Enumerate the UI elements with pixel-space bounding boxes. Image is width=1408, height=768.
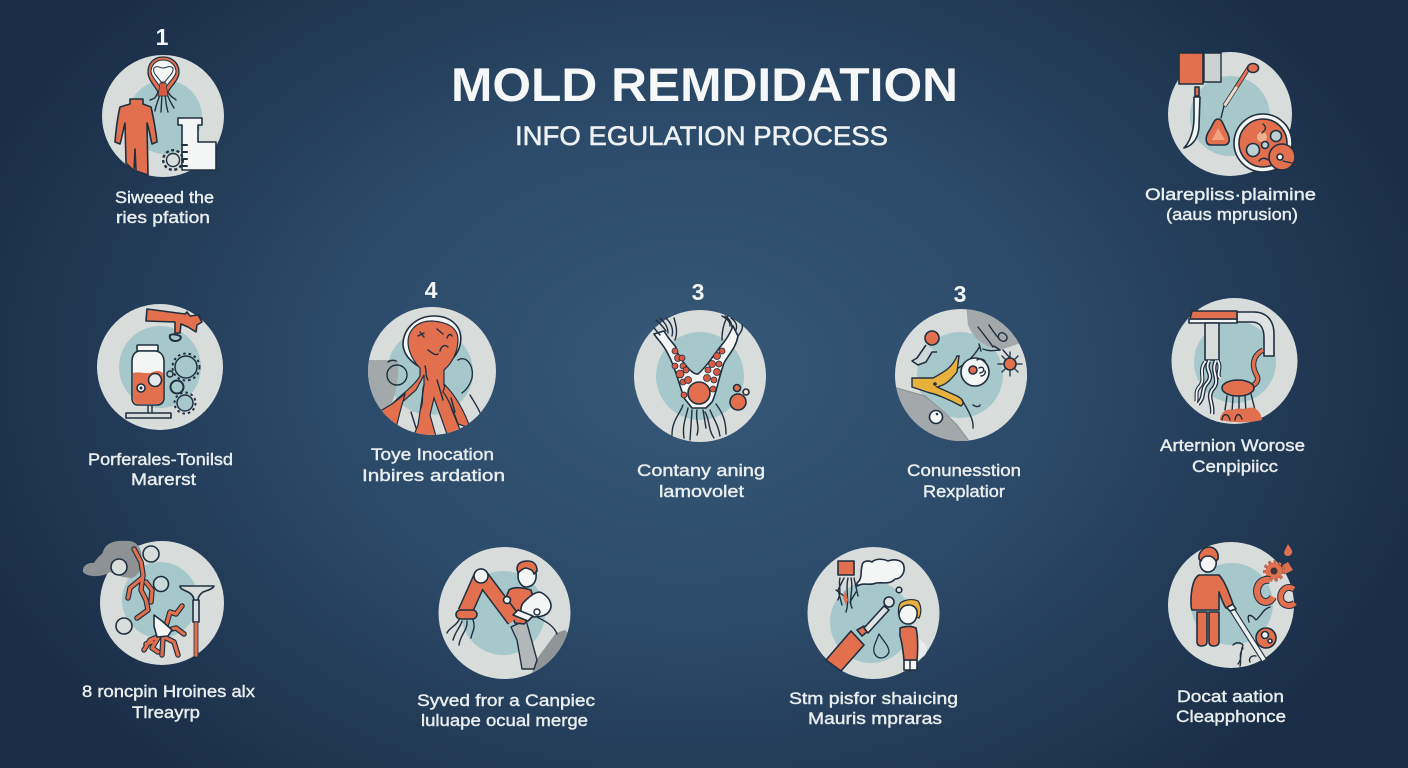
panel: top right step bbox=[1145, 52, 1316, 224]
label: Docat aation bbox=[1177, 687, 1284, 706]
step number 3: 3 bbox=[692, 279, 704, 305]
label: lamovolet bbox=[659, 482, 744, 501]
label: Toye Inocation bbox=[371, 445, 494, 464]
step number 4: 4 bbox=[425, 277, 438, 303]
label bbox=[789, 689, 958, 728]
label: Olarepliss·plaimine bbox=[1145, 185, 1316, 204]
step number 3: 3 bbox=[954, 281, 966, 307]
label: Arternion Worose bbox=[1160, 436, 1305, 455]
panel: step 3 right bbox=[895, 286, 1027, 501]
label: Porferales-Tonilsd bbox=[88, 450, 233, 469]
label bbox=[1145, 185, 1316, 224]
label: Cleapphonce bbox=[1176, 707, 1286, 726]
icon: mold growth bbox=[366, 307, 496, 440]
panel: step 1 bbox=[102, 24, 224, 227]
label: Tlreayrp bbox=[132, 703, 200, 722]
panel: bottom left step bbox=[82, 541, 256, 722]
panel: bottom centre-left step bbox=[417, 547, 596, 730]
label: Inbires ardation bbox=[362, 466, 505, 485]
label 1: ries pfation bbox=[116, 208, 210, 227]
label bbox=[362, 445, 505, 485]
label: (aaus mprusion) bbox=[1166, 205, 1298, 224]
icon: scraper, filter and petri dish bbox=[1168, 52, 1295, 176]
label bbox=[637, 461, 765, 501]
label: Conunesstion bbox=[907, 461, 1021, 480]
icon: worker cleaning with gears bbox=[1168, 542, 1295, 668]
label: Mauris mpraras bbox=[808, 709, 942, 728]
subtitle: INFO EGULATION PROCESS bbox=[515, 121, 888, 151]
label: 8 roncpin Hroines alx bbox=[82, 682, 256, 701]
label bbox=[1160, 436, 1305, 476]
label bbox=[82, 682, 256, 722]
panel: middle left step bbox=[88, 304, 233, 489]
label bbox=[1176, 687, 1286, 726]
panel: bottom centre-right step bbox=[789, 547, 958, 728]
label: Contany aning bbox=[637, 461, 765, 480]
label: Syved fror a Canpiec bbox=[417, 691, 596, 710]
label: luluape ocual merge bbox=[421, 711, 588, 730]
icon: wall crack and spores bbox=[895, 309, 1027, 441]
label 1 bbox=[115, 188, 214, 227]
icon: air mover and mold removal bbox=[1172, 298, 1298, 424]
panel: middle right step bbox=[1160, 298, 1305, 476]
icon: branching mold structure bbox=[634, 310, 766, 442]
label: Marerst bbox=[131, 470, 196, 489]
icon: worker with robotic arm bbox=[438, 547, 575, 680]
step number 1: 1 bbox=[156, 24, 169, 50]
icon: bottle, pipe and mold gears bbox=[97, 304, 223, 430]
panel: step 3 centre bbox=[634, 279, 766, 501]
icon: cloud, mold and squeegee bbox=[83, 541, 224, 665]
panel: step 4 bbox=[362, 277, 505, 485]
panel: bottom right step bbox=[1168, 542, 1295, 726]
label bbox=[88, 450, 233, 489]
icon: worker, sprayer and thought cloud bbox=[808, 547, 940, 679]
label: Cenpipiicc bbox=[1192, 457, 1279, 476]
label 1: Siweeed the bbox=[115, 188, 214, 207]
label: Stm pisfor shaiıcing bbox=[789, 689, 958, 708]
label bbox=[417, 691, 596, 730]
label: Rexplatior bbox=[923, 482, 1005, 501]
title: MOLD REMDIDATION bbox=[451, 58, 958, 111]
label bbox=[907, 461, 1021, 501]
icon: protective suit, mold spore and container bbox=[102, 55, 224, 177]
